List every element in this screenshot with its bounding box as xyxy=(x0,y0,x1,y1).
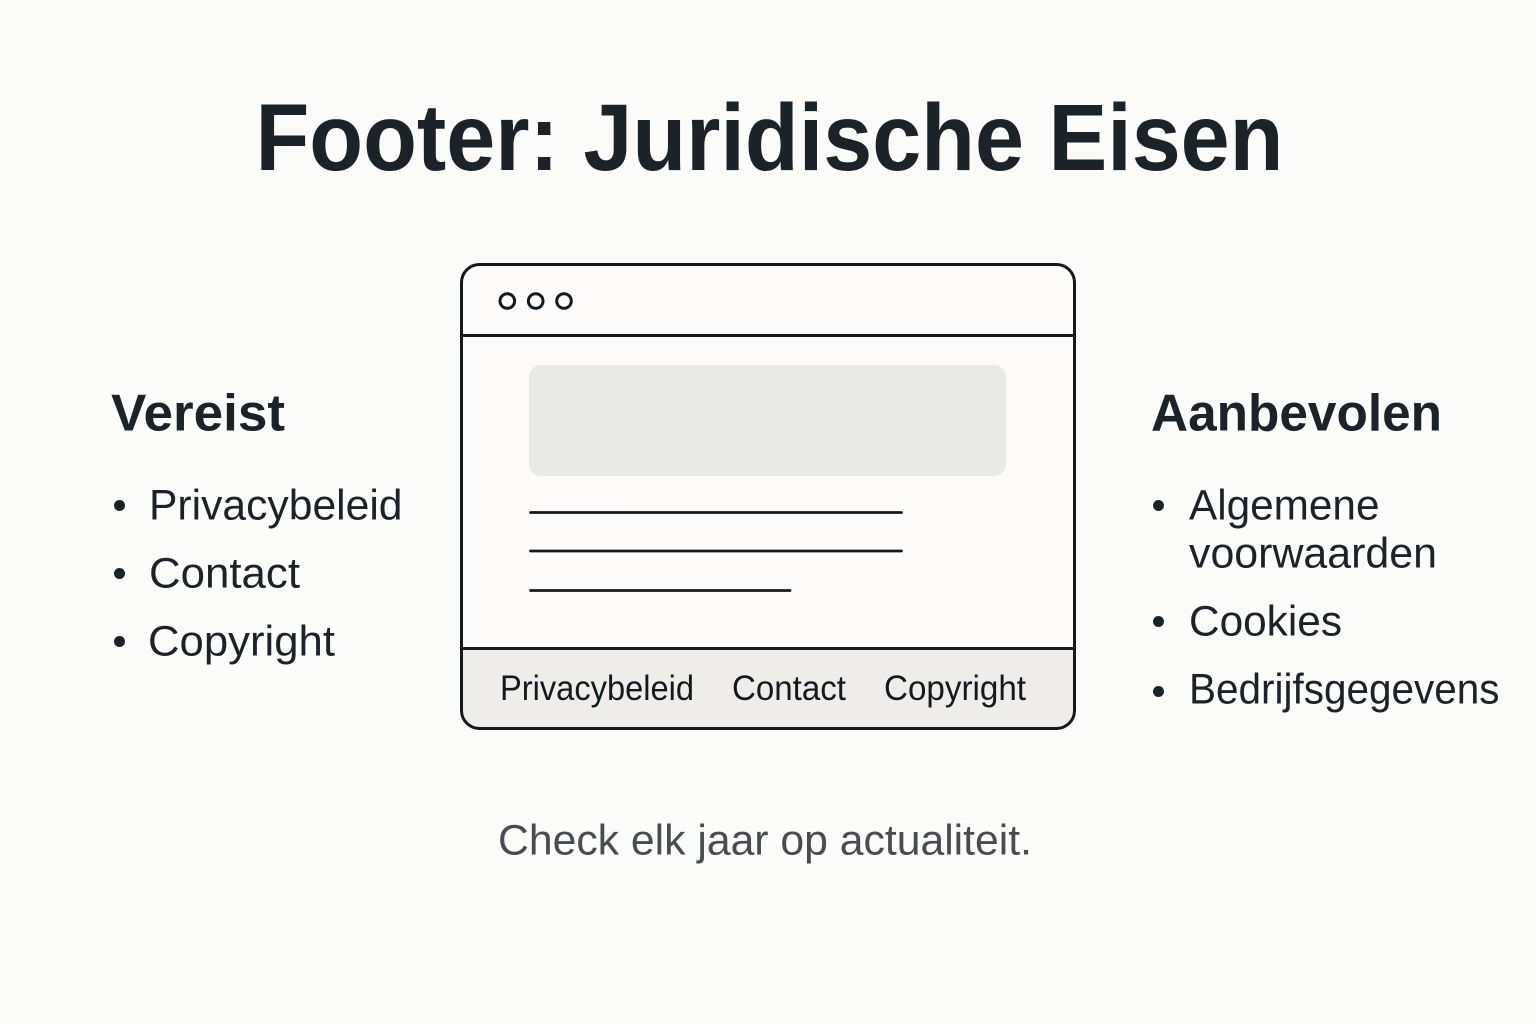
bullet xyxy=(1153,686,1164,697)
browser window illustration xyxy=(462,264,1074,728)
list item: cookies: Cookies xyxy=(1189,598,1342,646)
list item: copyright: Copyright xyxy=(148,618,335,666)
heading: aanbevolen: Aanbevolen xyxy=(1151,384,1442,442)
window frame xyxy=(462,264,1074,728)
content text lines xyxy=(530,512,902,590)
bullet xyxy=(114,568,125,579)
bullet xyxy=(114,500,125,511)
bullet xyxy=(1153,616,1164,627)
list item: algemene voorwaarden: Algemene xyxy=(1189,482,1380,530)
list item: algemene voorwaarden xyxy=(1189,482,1437,578)
list item: privacybeleid: Privacybeleid xyxy=(149,482,402,530)
closing note: Check elk jaar op actualiteit. xyxy=(498,816,1032,864)
panel: vereist xyxy=(111,384,402,666)
bullet xyxy=(1153,500,1164,511)
list item: contact: Contact xyxy=(149,550,300,598)
footer links: Contact xyxy=(732,669,846,708)
footer links: Copyright xyxy=(884,669,1026,708)
title: Footer: Juridische Eisen xyxy=(256,85,1284,191)
panel: aanbevolen xyxy=(1151,384,1500,714)
list item: bedrijfsgegevens: Bedrijfsgegevens xyxy=(1189,666,1500,714)
footer links xyxy=(500,669,1026,708)
footer links: Privacybeleid xyxy=(500,669,694,708)
content image placeholder xyxy=(529,365,1006,476)
list item: algemene voorwaarden: voorwaarden xyxy=(1189,530,1437,578)
window control dots xyxy=(500,294,571,308)
bullet xyxy=(114,636,125,647)
heading: vereist: Vereist xyxy=(111,384,285,442)
